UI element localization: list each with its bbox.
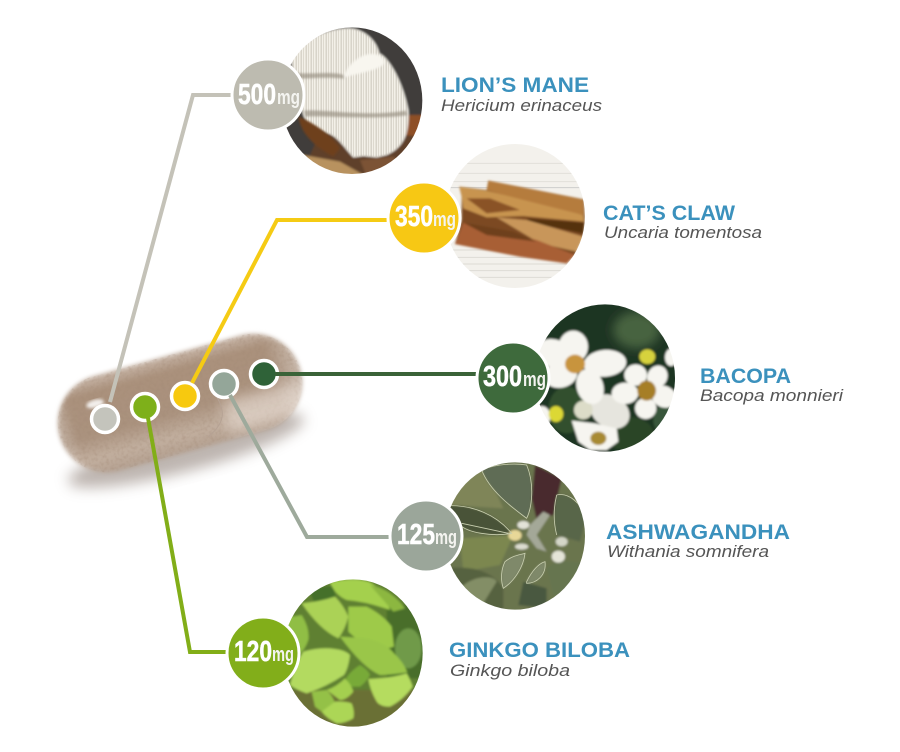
label: cat's claw: Uncaria tomentosa bbox=[604, 223, 762, 242]
label: bacopa: BACOPA bbox=[700, 365, 791, 388]
label: bacopa: Bacopa monnieri bbox=[700, 386, 844, 405]
capsule dot: bacopa bbox=[250, 360, 278, 388]
capsule dot: cat's claw bbox=[172, 382, 198, 410]
photo: bacopa flowers bbox=[540, 304, 675, 452]
connector: ginkgo bbox=[148, 418, 235, 652]
badge: 125mg bbox=[390, 500, 462, 572]
label: ashwagandha: ASHWAGANDHA bbox=[606, 521, 790, 544]
label: ginkgo biloba: GINKGO BILOBA bbox=[449, 639, 630, 662]
badge: 125mg: 125 bbox=[397, 519, 435, 551]
capsule dot: lion's mane bbox=[92, 406, 118, 432]
badge: 350mg: 350 bbox=[395, 201, 433, 233]
badge: 500mg bbox=[232, 59, 304, 131]
label: ashwagandha bbox=[606, 521, 790, 561]
connector: bacopa bbox=[275, 372, 485, 376]
label: ashwagandha: Withania somnifera bbox=[607, 542, 769, 561]
label: ginkgo biloba bbox=[449, 639, 630, 680]
badge: 500mg: 500 bbox=[238, 79, 276, 111]
badge: 120mg bbox=[227, 617, 299, 689]
capsule dot: ginkgo bbox=[132, 394, 158, 420]
badge: 300mg: mg bbox=[523, 369, 546, 391]
label: cat's claw bbox=[603, 202, 762, 242]
connector: cat's claw bbox=[192, 220, 395, 383]
photo: lion's mane mushroom bbox=[286, 27, 422, 174]
label: lion's mane bbox=[441, 74, 603, 115]
badge: 125mg: mg bbox=[435, 527, 457, 549]
panel: ashwagandha bbox=[390, 460, 790, 613]
badge: 120mg: mg bbox=[272, 644, 294, 666]
connector: lion's mane bbox=[110, 95, 240, 402]
panel: ginkgo biloba bbox=[227, 578, 630, 728]
panel: lion's mane bbox=[232, 25, 603, 178]
panel: bacopa bbox=[477, 302, 844, 455]
connector: ashwagandha bbox=[230, 395, 395, 537]
badge: 350mg bbox=[388, 182, 460, 254]
label: bacopa bbox=[700, 365, 844, 405]
label: lion's mane: LION’S MANE bbox=[441, 74, 589, 97]
badge: 120mg: 120 bbox=[234, 636, 272, 668]
label: lion's mane: Hericium erinaceus bbox=[441, 96, 603, 115]
panel: cat's claw bbox=[388, 142, 762, 292]
badge: 500mg: mg bbox=[277, 87, 300, 109]
photo: cat's claw bark bbox=[450, 144, 585, 288]
label: ginkgo biloba: Ginkgo biloba bbox=[450, 661, 570, 680]
label: cat's claw: CAT’S CLAW bbox=[603, 202, 735, 225]
photo: ginkgo leaves bbox=[288, 579, 423, 727]
capsule dot: ashwagandha bbox=[210, 370, 238, 398]
photo: ashwagandha leaves bbox=[450, 462, 585, 610]
badge: 300mg bbox=[477, 342, 549, 414]
badge: 300mg: 300 bbox=[483, 361, 522, 393]
capsule bbox=[55, 331, 310, 496]
badge: 350mg: mg bbox=[433, 209, 456, 231]
